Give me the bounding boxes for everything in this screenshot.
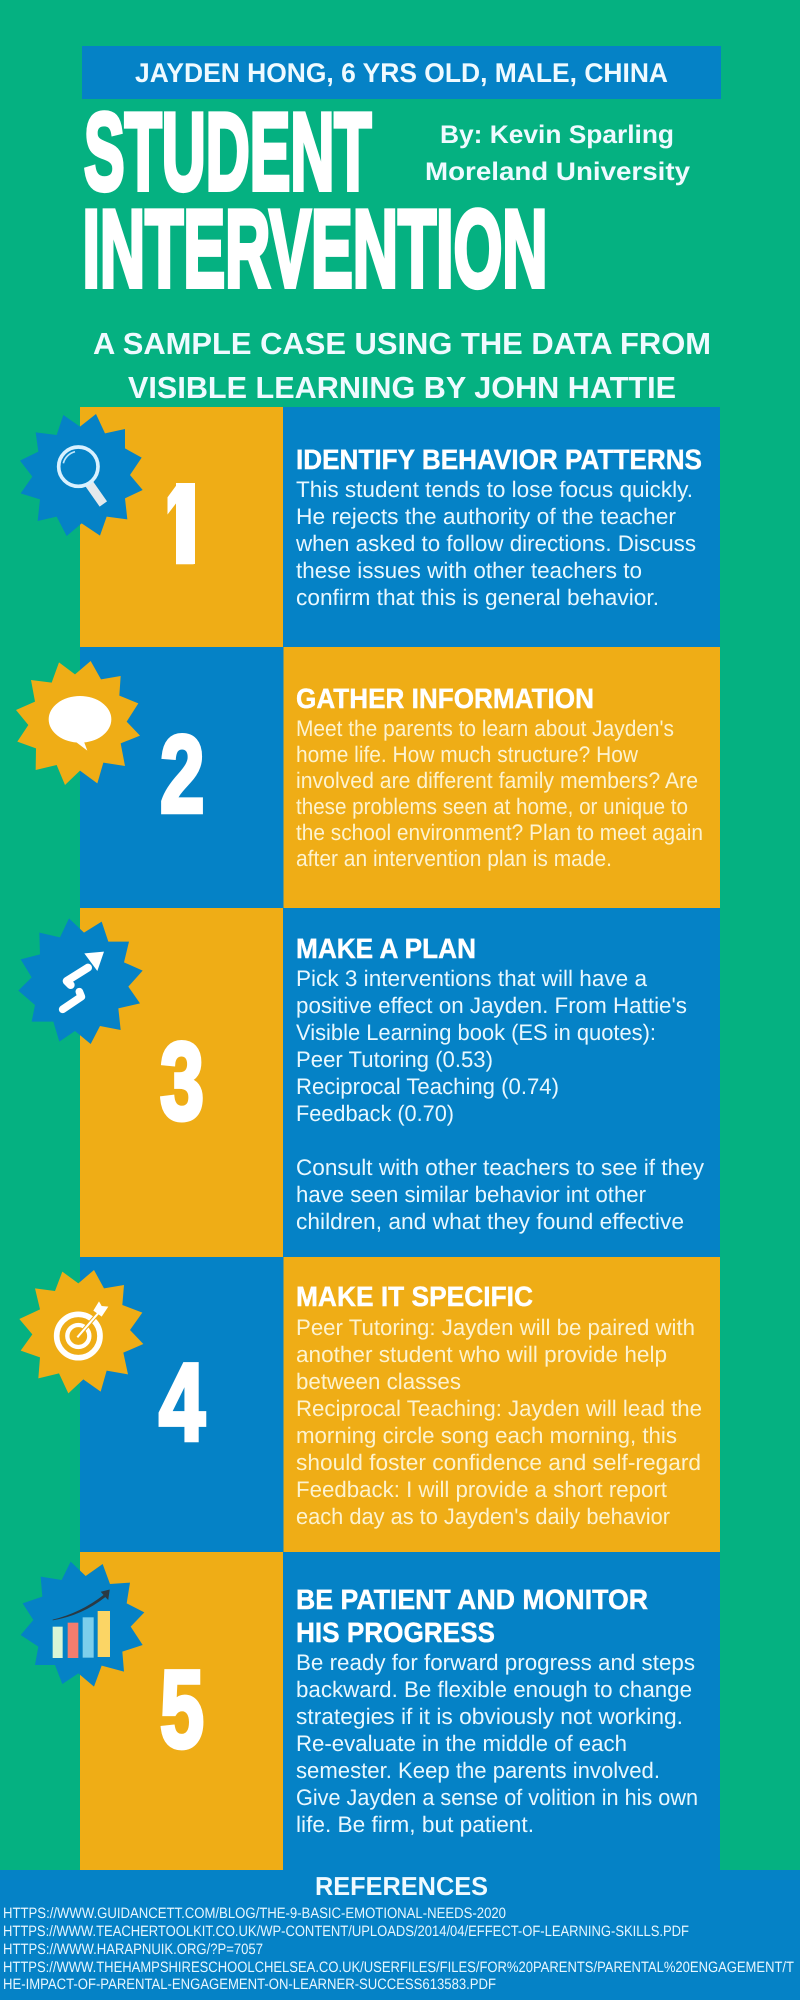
heading: make it specific: MAKE IT SPECIFIC [296, 1281, 533, 1312]
text block: step 3 body: Reciprocal Teaching (0.74) [296, 1074, 559, 1099]
panel: step 5 be patient and monitor [80, 1552, 720, 1870]
heading: make a plan: MAKE A PLAN [296, 933, 476, 964]
text block: step 2 body: these problems seen at home, or unique to [296, 794, 688, 819]
text block: step 5 body: life. Be firm, but patient. [296, 1812, 534, 1837]
text block: step 5 body: Be ready for forward progress and steps [296, 1650, 695, 1675]
text block: step 3 body: Peer Tutoring (0.53) [296, 1047, 493, 1072]
text block: step 2 body: involved are different family members? Are [296, 768, 698, 793]
text block: step 1 body: these issues with other teachers to [296, 558, 642, 583]
text block: step 1 body: He rejects the authority of the teacher [296, 504, 676, 529]
text block: step 4 body: between classes [296, 1369, 461, 1394]
title: STUDENT [84, 90, 372, 214]
text block: step 5 body: strategies if it is obviously not working. [296, 1704, 683, 1729]
text block: step 5 body: Give Jayden a sense of volition in his own [296, 1785, 698, 1810]
icon: target badge [19, 1270, 143, 1393]
text block: step 3 body [296, 966, 705, 1234]
number 1: 1 [165, 463, 194, 586]
text block: step 3 body: positive effect on Jayden. From Hattie's [296, 993, 687, 1018]
text block: step 5 body: semester. Keep the parents involved. [296, 1758, 660, 1783]
icon: speech bubble badge [16, 661, 140, 785]
text block: step 1 body: when asked to follow directions. Discuss [295, 531, 696, 556]
text block: step 5 body: backward. Be flexible enough to change [296, 1677, 692, 1702]
panel: references [0, 1870, 800, 2000]
text block: step 3 body: Pick 3 interventions that will have a [296, 966, 647, 991]
text block: step 1 body [295, 477, 696, 610]
text block: step 2 body: home life. How much structure? How [296, 742, 639, 767]
text block: reference list: HTTPS://WWW.HARAPNUIK.ORG/?P=7057 [3, 1941, 263, 1958]
text block: step 1 body: confirm that this is general behavior. [296, 585, 659, 610]
text block: step 4 body [296, 1315, 702, 1529]
text block: reference list [3, 1905, 794, 1993]
subtitle: A SAMPLE CASE USING THE DATA FROM [93, 327, 711, 361]
icon: magnifying glass badge [20, 414, 143, 536]
text block: step 3 body: Consult with other teachers to see if they [296, 1155, 705, 1180]
text block: step 3 body: Feedback (0.70) [296, 1101, 454, 1126]
text block: step 3 body: Visible Learning book (ES in quotes): [296, 1020, 656, 1045]
text block: step 2 body [296, 716, 703, 871]
heading: identify behavior patterns: IDENTIFY BEHAVIOR PATTERNS [296, 444, 702, 475]
text block: step 2 body: after an intervention plan is made. [296, 846, 612, 871]
heading: gather information: GATHER INFORMATION [296, 683, 594, 714]
text block: step 4 body: should foster confidence and self-regard [296, 1450, 701, 1475]
panel: step 3 make a plan [80, 908, 720, 1257]
text block: reference list: HTTPS://WWW.GUIDANCETT.COM/BLOG/THE-9-BASIC-EMOTIONAL-NEEDS-2020 [3, 1905, 506, 1922]
panel: step 1 identify behavior patterns [80, 407, 720, 647]
number 1 [158, 463, 203, 586]
author credit: By: Kevin Sparling [440, 121, 674, 149]
text block: step 4 body: morning circle song each morning, this [296, 1423, 677, 1448]
text block: step 4 body: Reciprocal Teaching: Jayden will lead the [296, 1396, 702, 1421]
number 5: 5 [160, 1648, 204, 1771]
text block: step 2 body: Meet the parents to learn about Jayden's [296, 716, 674, 741]
banner: student details: JAYDEN HONG, 6 YRS OLD, MALE, CHINA [135, 58, 668, 88]
icon: bar chart badge [21, 1562, 144, 1687]
author credit: Moreland University [425, 158, 691, 186]
heading: references: REFERENCES [315, 1871, 488, 1901]
title [82, 90, 548, 310]
number 2: 2 [160, 713, 204, 836]
text block: step 5 body: Re-evaluate in the middle of each [296, 1731, 627, 1756]
text block: reference list: HE-IMPACT-OF-PARENTAL-ENGAGEMENT-ON-LEARNER-SUCCESS613583.PDF [3, 1976, 496, 1993]
number 3: 3 [160, 1020, 204, 1143]
text block: step 4 body: each day as to Jayden's daily behavior [296, 1504, 670, 1529]
author credit [425, 121, 691, 186]
text block: step 3 body: have seen similar behavior int other [296, 1182, 646, 1207]
text block: step 4 body: Feedback: I will provide a short report [296, 1477, 668, 1502]
text block: step 1 body: This student tends to lose focus quickly. [296, 477, 693, 502]
subtitle [93, 327, 711, 405]
text block: reference list: HTTPS://WWW.TEACHERTOOLKIT.CO.UK/WP-CONTENT/UPLOADS/2014/04/EFFECT-OF-LEARNING-SKILLS.PDF [3, 1923, 689, 1940]
text block: step 4 body: Peer Tutoring: Jayden will be paired with [296, 1315, 695, 1340]
panel: step 4 make it specific [80, 1257, 720, 1552]
text block: step 4 body: another student who will provide help [296, 1342, 667, 1367]
heading: be patient and monitor his progress: BE PATIENT AND MONITOR [296, 1584, 648, 1615]
text block: step 5 body [296, 1650, 698, 1837]
text block: step 2 body: the school environment? Plan to meet again [296, 820, 703, 845]
subtitle: VISIBLE LEARNING BY JOHN HATTIE [128, 371, 676, 405]
banner: student details [82, 46, 721, 99]
number 4: 4 [159, 1341, 205, 1464]
panel: step 2 gather information [80, 647, 720, 908]
text block: step 3 body: children, and what they found effective [296, 1209, 684, 1234]
heading: be patient and monitor his progress: HIS PROGRESS [296, 1617, 495, 1648]
icon: arrow path badge [18, 918, 143, 1044]
heading: be patient and monitor his progress [296, 1584, 648, 1648]
